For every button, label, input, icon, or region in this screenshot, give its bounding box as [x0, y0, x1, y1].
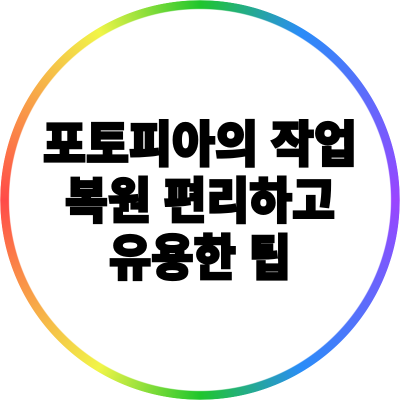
- title line 3: 유용한 팁: [109, 232, 291, 286]
- title line 2: 복원 편리하고: [65, 175, 335, 229]
- title line 1: 포토피아의 작업: [43, 118, 357, 172]
